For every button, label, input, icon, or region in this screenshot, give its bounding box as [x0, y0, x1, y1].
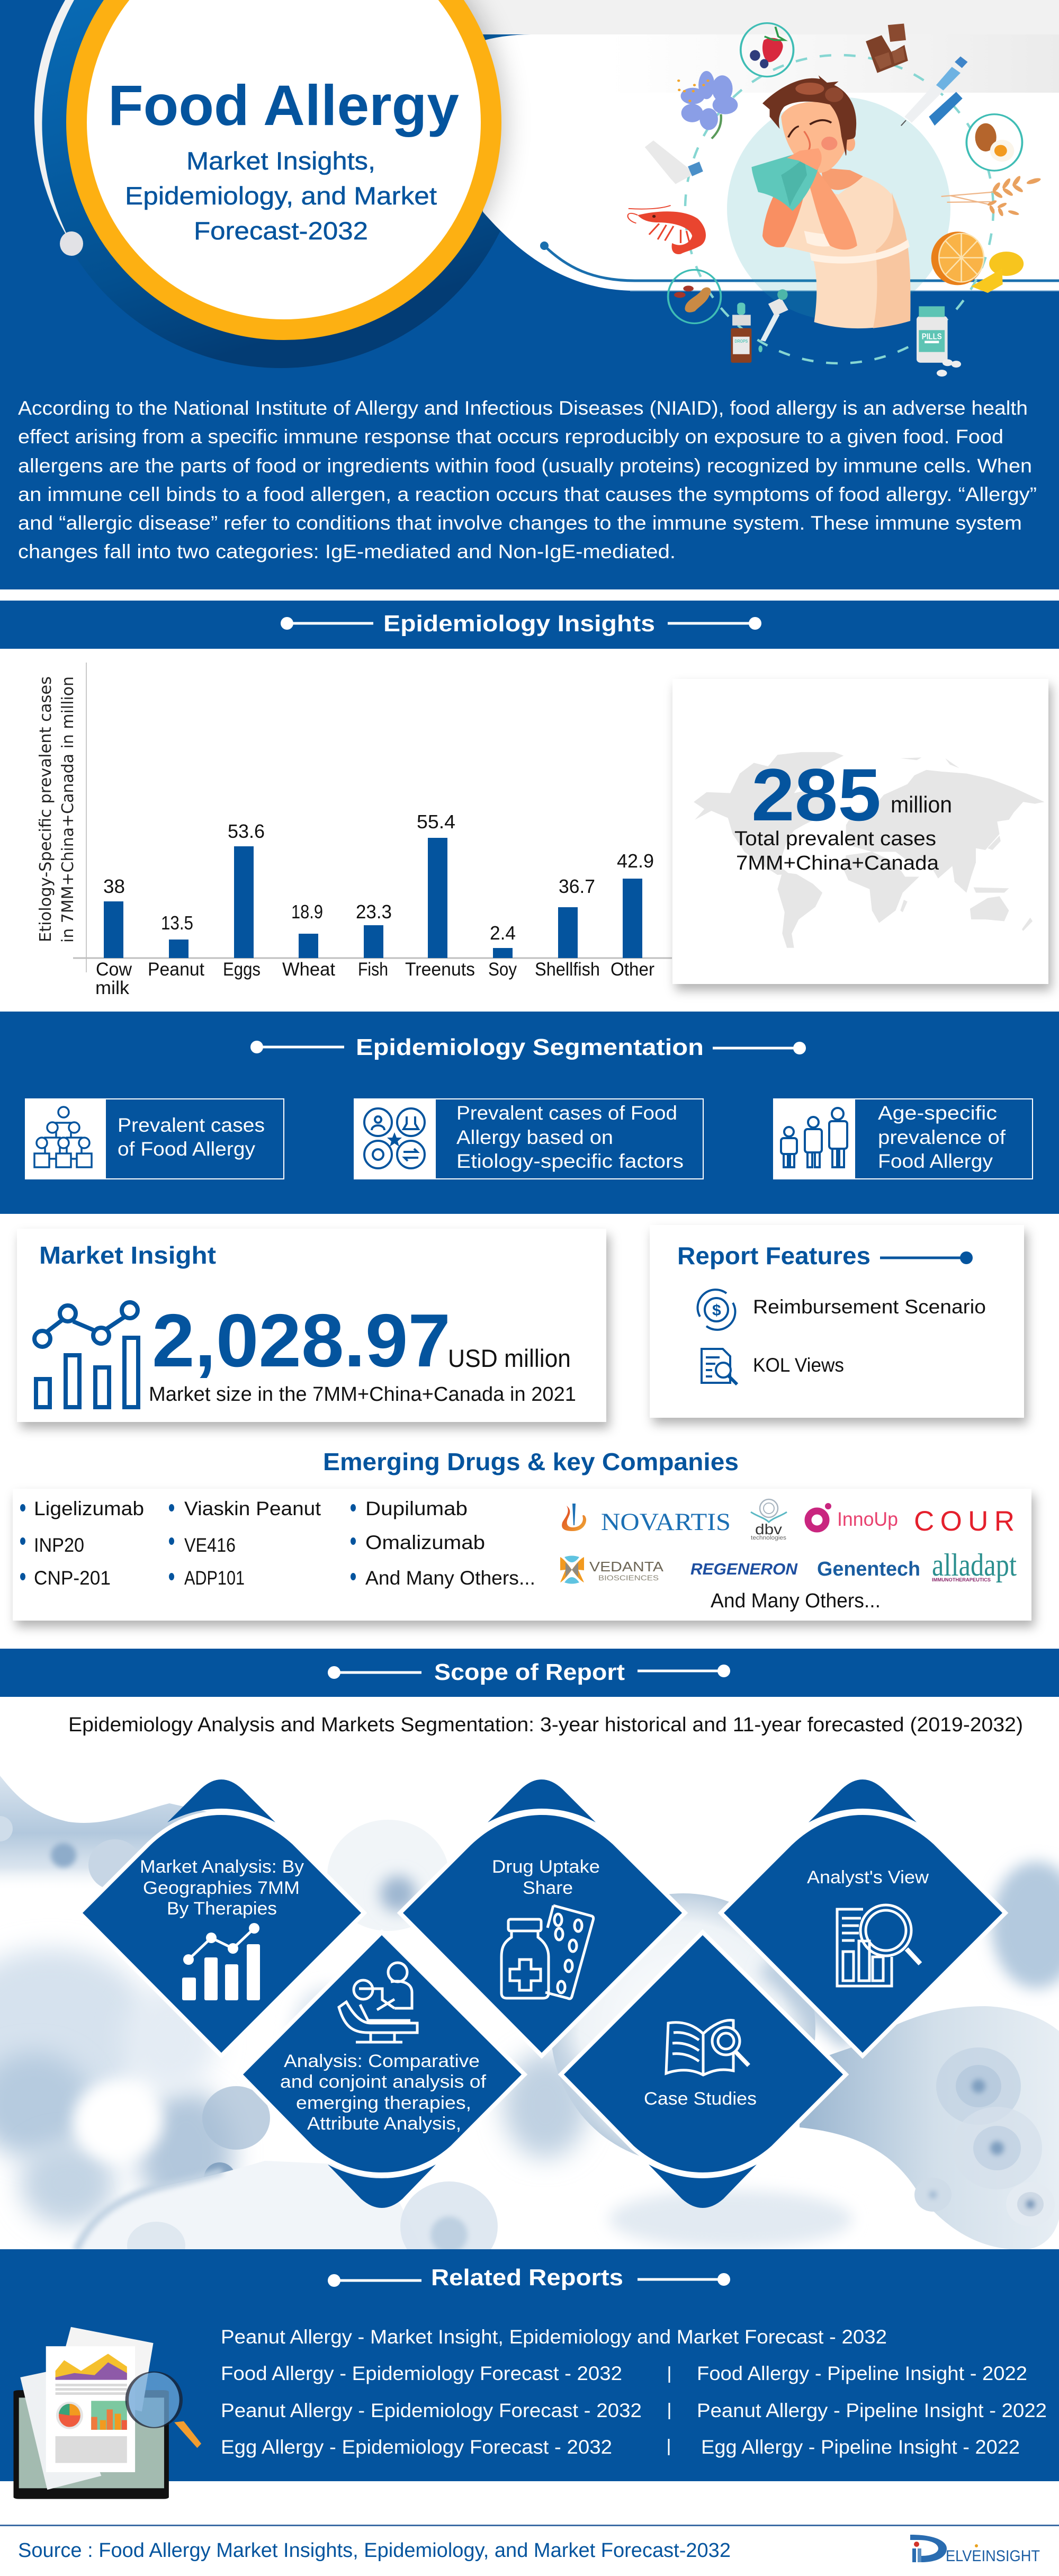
subtitle: Epidemiology, and Market	[125, 182, 437, 210]
related reports list: Peanut Allergy - Market Insight, Epidemiology and Market Forecast - 2032	[221, 2326, 887, 2348]
category labels: Other	[611, 959, 654, 980]
logo: DelveInsight: ELVEINSIGHT	[946, 2547, 1040, 2565]
value labels: 55.4	[417, 811, 455, 833]
icon: peanuts	[668, 270, 721, 323]
panel: epidemiology segmentation: Epidemiology Segmentation	[356, 1034, 704, 1060]
icon: growth chart	[34, 1302, 138, 1407]
bar chart: etiology-specific prevalent cases	[37, 663, 672, 998]
intro paragraph: effect arising from a specific immune response that occurs reproducibly on exposure to a given food. Food	[18, 426, 1003, 448]
hair	[762, 75, 856, 156]
icon: reimbursement	[698, 1290, 735, 1330]
subtitle	[125, 147, 437, 245]
icon: shrimp	[628, 205, 706, 254]
source line: Source : Food Allergy Market Insights, Epidemiology, and Market Forecast-2032	[18, 2539, 731, 2562]
diamond: market analysis: By Therapies	[167, 1899, 277, 1919]
shirt	[784, 176, 910, 328]
icon: KOL views	[702, 1349, 737, 1384]
icon: clinician and patient	[339, 1963, 417, 2042]
logo: Vedanta Biosciences	[560, 1556, 664, 1584]
diamond: drug uptake share	[403, 1779, 682, 2053]
panel: total prevalent cases	[672, 679, 1048, 984]
y axis title: Etiology-Specific prevalent cases	[37, 676, 55, 942]
diamond: comparative analysis: and conjoint analysis of	[280, 2072, 487, 2092]
icon: citrus	[931, 231, 1024, 293]
logo: Novartis	[562, 1504, 731, 1536]
segment: prevalent cases: of Food Allergy	[118, 1138, 256, 1160]
diamond: market analysis: Market Analysis: By	[140, 1857, 304, 1877]
logo: DBV Technologies: dbv	[755, 1521, 782, 1537]
diamond: comparative analysis: emerging therapies,	[296, 2093, 471, 2113]
related reports band: Related Reports	[431, 2265, 623, 2291]
related reports list: Egg Allergy - Pipeline Insight - 2022	[701, 2436, 1020, 2458]
icon: drops bottle: DROPS	[734, 339, 748, 344]
category labels: Eggs	[223, 959, 261, 980]
logo: Genentech: Genentech	[817, 1558, 920, 1580]
panel: epidemiology segmentation	[0, 1012, 1059, 1214]
arms	[762, 170, 857, 249]
panel: report features: Report Features	[677, 1242, 870, 1269]
segment: age-specific prevalence: Food Allergy	[878, 1150, 993, 1172]
category labels: Fish	[358, 959, 388, 980]
neck	[821, 168, 863, 190]
caption: and many others: And Many Others...	[711, 1590, 881, 1612]
value labels: 42.9	[617, 850, 654, 872]
logo: Vedanta Biosciences: BIOSCIENCES	[598, 1573, 659, 1582]
diamond: market analysis: Geographies 7MM	[143, 1878, 300, 1898]
segment: age-specific prevalence	[773, 1098, 1033, 1179]
related reports list: Food Allergy - Epidemiology Forecast - 2032	[221, 2363, 622, 2384]
intro paragraph	[18, 397, 1037, 562]
logo: Alladapt: alladapt	[932, 1548, 1017, 1582]
scope of report header band	[0, 1649, 1059, 1697]
related reports list: Peanut Allergy - Epidemiology Forecast - 2032	[221, 2400, 642, 2421]
category labels: Wheat	[282, 959, 335, 980]
value labels: 23.3	[356, 901, 392, 923]
illustration: pale circle behind person	[727, 97, 950, 320]
category labels: Peanut	[148, 959, 204, 980]
panel: total prevalent cases: 285	[751, 753, 881, 836]
icon: open book with magnifier	[666, 2020, 749, 2075]
segment: etiology-specific factors	[354, 1098, 703, 1179]
panel: total prevalent cases: million	[891, 792, 952, 818]
logo: COUR: COUR	[914, 1506, 1015, 1537]
face	[781, 102, 855, 173]
background: blurred cells	[0, 1776, 1059, 2271]
logo: Vedanta Biosciences: VEDANTA	[589, 1559, 664, 1575]
logo: Regeneron: REGENERON	[690, 1560, 798, 1578]
logo: DelveInsight	[910, 2535, 1040, 2565]
diamond: comparative analysis	[243, 1935, 522, 2208]
category labels: Shellfish	[535, 959, 600, 980]
icon: pills bottle	[917, 306, 961, 377]
related reports list: Peanut Allergy - Pipeline Insight - 2022	[697, 2400, 1047, 2421]
category labels: Treenuts	[405, 959, 475, 980]
bullet list: drugs: VE416	[184, 1534, 236, 1556]
world map	[694, 752, 1044, 948]
bullet list: drugs: Dupilumab	[365, 1498, 468, 1519]
panel: report features: KOL Views	[753, 1354, 844, 1376]
icon: drops bottle	[731, 302, 751, 363]
value labels: 38	[103, 875, 125, 897]
panel: market insight: 2,028.97	[152, 1299, 451, 1383]
panel: market insight: USD million	[448, 1344, 571, 1372]
icon: reimbursement: $	[712, 1302, 721, 1319]
bullet list: drugs: Omalizumab	[365, 1532, 485, 1553]
category labels: milk	[95, 978, 130, 998]
icon: flower	[677, 71, 738, 139]
segment: prevalent cases	[25, 1098, 284, 1179]
title: Food Allergy	[108, 73, 459, 137]
logo: Alladapt: IMMUNOTHERAPEUTICS	[932, 1577, 991, 1582]
segment: age-specific prevalence: prevalence of	[878, 1126, 1006, 1148]
icon: bar and line chart	[182, 1923, 260, 2000]
category labels	[95, 959, 654, 998]
logo: InnoUp	[808, 1503, 898, 1530]
diamond: case studies	[564, 1935, 843, 2208]
diamond: market analysis	[83, 1779, 361, 2053]
bullet list: drugs: Viaskin Peanut	[184, 1498, 321, 1519]
subtitle: Forecast-2032	[194, 217, 368, 245]
scope of report header band: Scope of Report	[434, 1659, 625, 1685]
y axis title: in 7MM+China+Canada in million	[59, 676, 77, 943]
bars	[104, 838, 642, 958]
illustration: tablet with reports and magnifier	[14, 2327, 201, 2499]
related reports band	[0, 2249, 1059, 2481]
segment: etiology-specific factors: Prevalent cases of Food	[456, 1102, 677, 1124]
diamond: analyst's view: Analyst's View	[807, 1867, 929, 1888]
icon: wheat	[941, 175, 1042, 217]
panel: report features: Reimbursement Scenario	[753, 1296, 986, 1318]
panel: market insight: Market Insight	[39, 1241, 216, 1269]
y axis title	[37, 676, 77, 943]
diamond: analyst's view	[724, 1779, 1002, 2053]
intro paragraph: and “allergic disease” refer to conditions that involve changes to the immune system. These immune system	[18, 512, 1022, 534]
related reports list: Egg Allergy - Epidemiology Forecast - 2032	[221, 2436, 612, 2458]
icon: berries	[741, 23, 794, 77]
bullet list: drugs: Ligelizumab	[34, 1498, 144, 1519]
category labels: Cow	[96, 959, 132, 980]
bullet list: drugs	[20, 1498, 535, 1589]
icon: medicine bottle and blister pack	[501, 1906, 594, 1999]
value labels: 36.7	[559, 875, 595, 897]
segment: prevalent cases: Prevalent cases	[118, 1114, 265, 1136]
epidemiology insights header band	[0, 601, 1059, 649]
hand	[787, 148, 822, 170]
value labels: 53.6	[228, 820, 265, 842]
bullet list: drugs: ADP101	[184, 1567, 245, 1589]
scope description: Epidemiology Analysis and Markets Segmentation: 3-year historical and 11-year forecasted (2019-2032)	[68, 1714, 1023, 1736]
bullet list: drugs: INP20	[34, 1534, 84, 1556]
panel: market insight: Market size in the 7MM+China+Canada in 2021	[149, 1383, 576, 1406]
related reports list: Food Allergy - Pipeline Insight - 2022	[697, 2363, 1027, 2384]
diamond: case studies: Case Studies	[644, 2089, 757, 2109]
segment: age-specific prevalence: Age-specific	[878, 1102, 997, 1124]
value labels: 18.9	[291, 901, 323, 923]
panel: scope diamonds	[83, 1779, 1002, 2208]
intro paragraph: According to the National Institute of Allergy and Infectious Diseases (NIAID), food allergy is an adverse health	[18, 397, 1028, 419]
diamond: drug uptake share: Share	[523, 1878, 573, 1898]
panel: report features	[650, 1225, 1024, 1418]
value labels: 13.5	[161, 912, 193, 934]
icon: injector pen	[901, 56, 968, 126]
bullet list: drugs: And Many Others...	[365, 1567, 535, 1589]
intro paragraph: changes fall into two categories: IgE-mediated and Non-IgE-mediated.	[18, 541, 676, 562]
logo: DBV Technologies: technologies	[751, 1535, 787, 1541]
logo: InnoUp: InnoUp	[837, 1508, 898, 1530]
icon: pills bottle: PILLS	[922, 332, 942, 341]
tissue	[751, 151, 820, 211]
icon: inhaler	[645, 140, 703, 184]
diamond: drug uptake share: Drug Uptake	[492, 1857, 600, 1877]
icon: dropper	[758, 289, 788, 352]
diamond: comparative analysis: Analysis: Comparative	[284, 2051, 480, 2071]
logo: Novartis: NOVARTIS	[601, 1508, 731, 1536]
related reports list	[221, 2326, 1047, 2458]
panel: total prevalent cases: 7MM+China+Canada	[736, 852, 939, 874]
icon: eggs	[966, 114, 1022, 171]
intro paragraph: an immune cell binds to a food allergen, a reaction occurs that causes the symptoms of food allergy. “Allergy”	[18, 484, 1037, 505]
icon: chocolate	[866, 24, 908, 73]
hero section	[0, 0, 1059, 589]
value labels	[103, 811, 654, 944]
bullet list: drugs: CNP-201	[34, 1567, 111, 1589]
diamond: comparative analysis: Attribute Analysis,	[307, 2114, 461, 2134]
segment: etiology-specific factors: Allergy based on	[456, 1126, 613, 1148]
illustration: sneezing person and allergens	[628, 23, 1042, 377]
intro paragraph: allergens are the parts of food or ingredients within food (usually proteins) recognized by immune cells. When	[18, 455, 1032, 477]
footer rule	[0, 2525, 1059, 2526]
logo: DBV Technologies	[751, 1499, 787, 1541]
segment: etiology-specific factors: Etiology-specific factors	[456, 1150, 684, 1172]
subtitle: Market Insights,	[186, 147, 375, 175]
panel: total prevalent cases: Total prevalent cases	[734, 828, 936, 850]
heading: emerging drugs and key companies: Emerging Drugs & key Companies	[323, 1448, 739, 1475]
epidemiology insights header band: Epidemiology Insights	[383, 611, 655, 637]
panel: emerging drugs and companies	[13, 1489, 1031, 1621]
panel: market insight	[17, 1229, 606, 1422]
category labels: Soy	[488, 959, 517, 980]
illustration: dashed ring of allergens	[685, 55, 993, 363]
icon: report with magnifier	[837, 1905, 920, 1986]
value labels: 2.4	[490, 922, 516, 944]
